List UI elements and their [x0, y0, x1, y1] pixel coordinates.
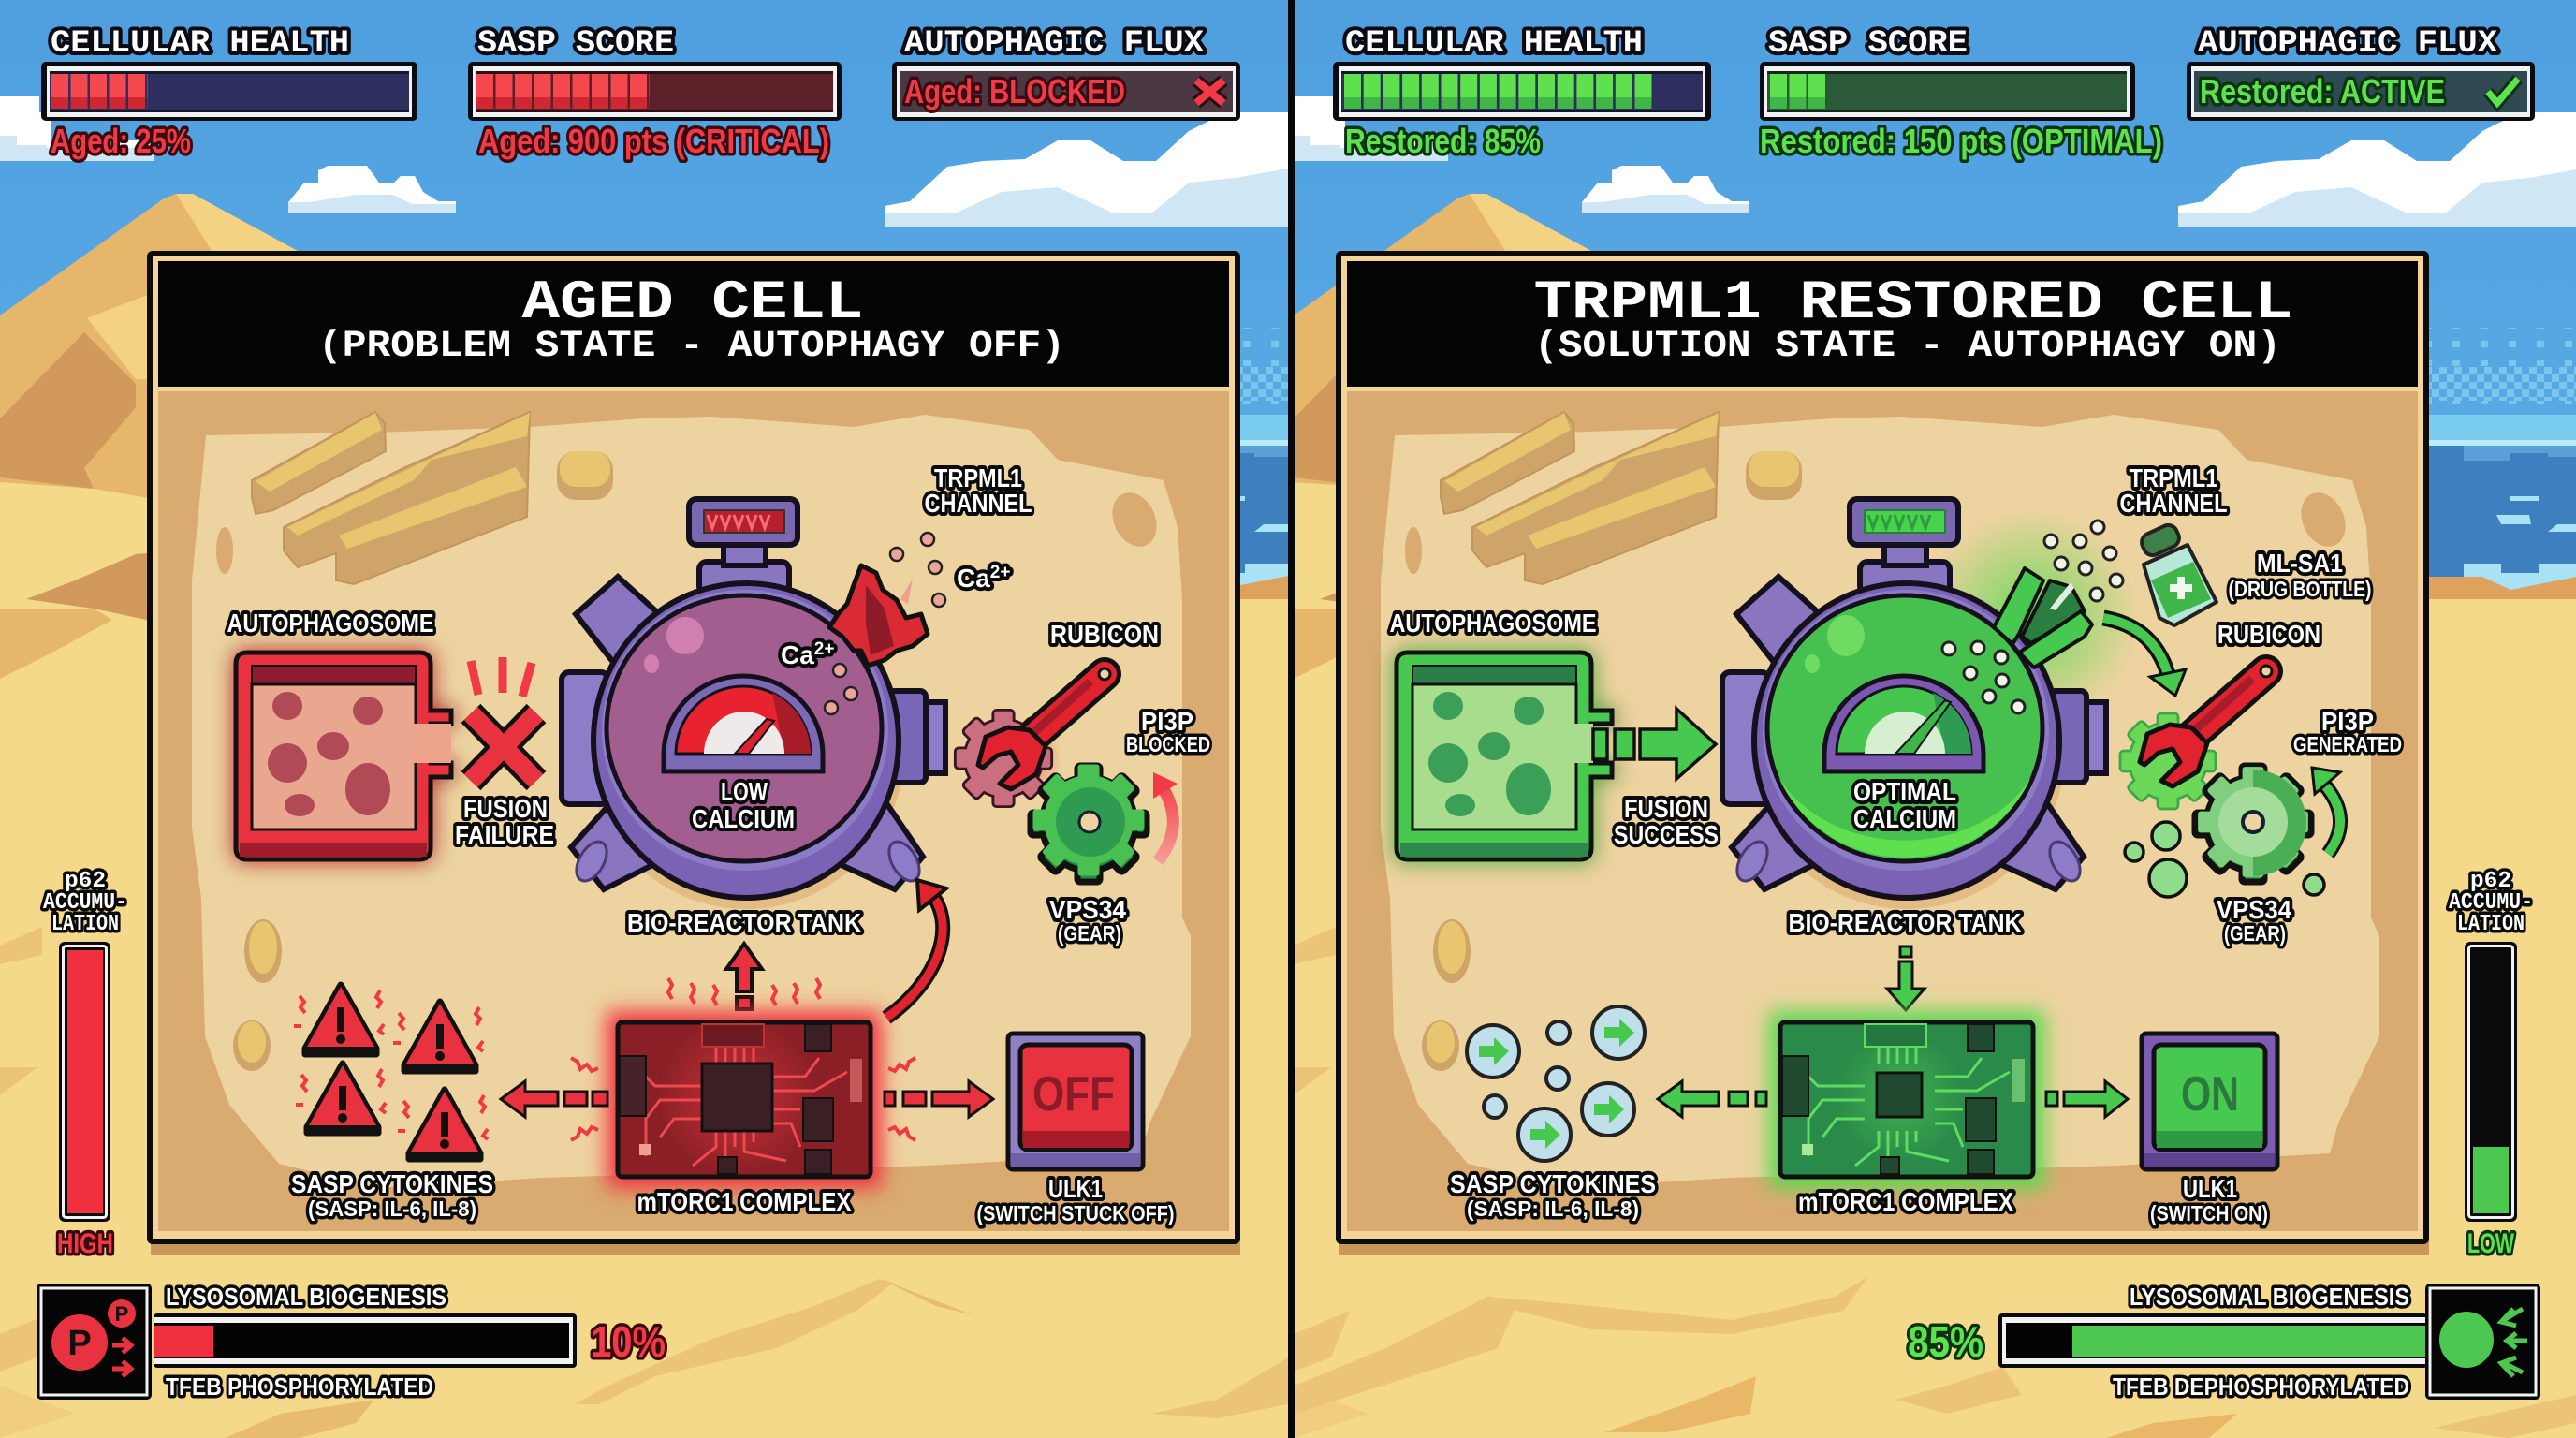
active gear and rubicon wrench	[2121, 666, 2272, 808]
label: rubicon: RUBICON	[2217, 620, 2320, 649]
label: SASP cytokines: (SASP: IL-6, IL-8)	[1467, 1196, 1639, 1221]
icon: green check	[2488, 79, 2518, 103]
label: SASP cytokines: SASP CYTOKINES	[291, 1169, 493, 1198]
heading: aged cell: (PROBLEM STATE - AUTOPHAGY OFF)	[318, 326, 1065, 368]
ULK1 switch on	[2142, 1034, 2277, 1169]
label: VPS34: VPS34	[2217, 895, 2291, 924]
mTORC1 circuit board	[618, 1018, 871, 1177]
lysosomal biogenesis: aged: LYSOSOMAL BIOGENESIS	[166, 1283, 446, 1311]
panel: aged cell	[147, 251, 1240, 1255]
p62 gauge: restored low	[2449, 869, 2533, 1259]
label: Ca2+ lower: 2+	[814, 639, 834, 659]
background: right beach scene	[1294, 0, 2576, 1438]
label: VPS34: VPS34	[1049, 895, 1126, 924]
label: VPS34	[1049, 895, 1126, 946]
heading: aged cell	[158, 261, 1229, 387]
ULK1 switch off	[1008, 1034, 1143, 1169]
label: SASP cytokines: (SASP: IL-6, IL-8)	[308, 1196, 476, 1221]
HUD: restored SASP score	[1760, 26, 2135, 121]
lysosomal biogenesis: aged	[37, 1283, 666, 1401]
lysosomal biogenesis: restored: TFEB DEPHOSPHORYLATED	[2113, 1372, 2409, 1401]
p62 gauge: aged high: ACCUMU-	[43, 890, 127, 916]
calcium particles	[825, 533, 945, 714]
faded gear and rubicon wrench	[957, 668, 1110, 805]
label: low calcium: LOW	[721, 777, 768, 806]
HUD: aged cellular health: CELLULAR HEALTH	[51, 26, 349, 62]
HUD: aged autophagic flux: Aged: BLOCKED	[904, 72, 1125, 110]
label: optimal calcium: OPTIMAL	[1853, 777, 1956, 806]
arrow: fading red	[1153, 772, 1178, 861]
VPS34 green gear	[1031, 764, 1147, 882]
icon: ML-SA1 drug bottle	[2139, 522, 2217, 625]
HUD: aged SASP score: SASP SCORE	[477, 26, 674, 62]
lysosomal biogenesis: aged: 10%	[591, 1317, 666, 1366]
heading: restored cell: (SOLUTION STATE - AUTOPHAGY ON)	[1534, 326, 2281, 368]
icon: TFEB phosphorylated	[37, 1284, 152, 1400]
label: TRPML1 channel	[925, 463, 1032, 518]
label: VPS34: (GEAR)	[1058, 921, 1121, 946]
label: ULK1 switch stuck off: (SWITCH STUCK OFF)	[977, 1201, 1174, 1225]
lysosomal biogenesis: restored: LYSOSOMAL BIOGENESIS	[2130, 1283, 2409, 1311]
label: optimal calcium: CALCIUM	[1853, 804, 1956, 833]
label: PI3P generated: PI3P	[2321, 707, 2374, 736]
p62 gauge: aged high: LATION	[51, 912, 119, 937]
label: ML-SA1	[2228, 549, 2372, 601]
heat squiggles	[571, 978, 915, 1140]
autophagosome with red glow	[236, 653, 451, 859]
HUD: restored value 150 pts: Restored: 150 pts (OPTIMAL)	[1760, 122, 2162, 160]
label: bio-reactor tank: BIO-REACTOR TANK	[1788, 908, 2022, 937]
HUD: aged autophagic flux: AUTOPHAGIC FLUX	[904, 26, 1205, 62]
label: autophagosome: AUTOPHAGOSOME	[1389, 609, 1597, 638]
HUD: restored cellular health: CELLULAR HEALTH	[1345, 26, 1643, 62]
VPS34 light gear	[2195, 766, 2311, 882]
arrow: mTORC1 to SASP	[501, 1081, 607, 1117]
label: PI3P generated: GENERATED	[2293, 732, 2402, 756]
label: fusion success: SUCCESS	[1614, 820, 1719, 849]
p62 gauge: aged high	[43, 869, 127, 1259]
HUD: restored autophagic flux: AUTOPHAGIC FLUX	[2198, 26, 2498, 62]
label: ML-SA1: ML-SA1	[2257, 549, 2343, 578]
arrow: drug to rubicon	[2103, 618, 2186, 696]
label: TRPML1 channel: CHANNEL	[2119, 489, 2228, 518]
mTORC1 circuit board	[1780, 1022, 2033, 1177]
ULK1 switch on: ON	[2181, 1067, 2239, 1122]
icon: fusion failure X	[471, 657, 536, 781]
label: ULK1 switch on	[2150, 1174, 2268, 1225]
broken TRPML1 channel	[829, 565, 928, 666]
label: bio-reactor tank: BIO-REACTOR TANK	[627, 908, 861, 937]
arrow: fusion success	[1593, 709, 1716, 779]
HUD: restored SASP score: SASP SCORE	[1768, 26, 1968, 62]
label: mTORC1 complex: mTORC1 COMPLEX	[1798, 1187, 2013, 1216]
icon: TFEB dephosphorylated	[2425, 1284, 2540, 1400]
label: low calcium	[692, 777, 795, 833]
arrow: tank to mTORC1	[1887, 946, 1925, 1010]
label: ULK1 switch stuck off	[977, 1174, 1174, 1225]
lysosomal biogenesis: restored: 85%	[1908, 1317, 1983, 1366]
label: SASP cytokines	[291, 1169, 493, 1221]
bio-reactor tank (optimal calcium)	[1722, 499, 2106, 909]
HUD: restored autophagic flux	[2187, 26, 2535, 121]
label: PI3P generated	[2293, 707, 2402, 756]
HUD: aged value 900 pts: Aged: 900 pts (CRITICAL)	[478, 122, 829, 160]
label: rubicon: RUBICON	[1050, 620, 1159, 649]
open channel glow	[1924, 510, 2139, 726]
p62 gauge: restored low: LOW	[2467, 1228, 2514, 1259]
open TRPML1 channel	[1994, 568, 2092, 668]
heading: restored cell: TRPML1 RESTORED CELL	[1533, 273, 2293, 334]
HUD: aged cellular health	[41, 26, 417, 121]
label: fusion failure: FAILURE	[455, 820, 554, 849]
p62 gauge: aged high: HIGH	[57, 1228, 113, 1259]
label: low calcium: CALCIUM	[692, 804, 795, 833]
HUD: restored autophagic flux: Restored: ACTIVE	[2200, 72, 2445, 110]
heading: aged cell: AGED CELL	[522, 273, 863, 334]
arrow: green curved	[2312, 768, 2340, 854]
heading: restored cell	[1347, 261, 2418, 387]
icon: red X	[1196, 81, 1223, 103]
label: fusion success	[1614, 794, 1719, 849]
p62 gauge: restored low: ACCUMU-	[2449, 890, 2533, 916]
autophagosome with green glow	[1397, 653, 1612, 859]
ULK1 switch off: OFF	[1032, 1067, 1115, 1122]
background: left beach scene	[0, 0, 1288, 1438]
label: fusion failure: FUSION	[463, 794, 548, 823]
icon: TFEB phosphorylated: P	[115, 1302, 128, 1326]
label: PI3P blocked	[1126, 707, 1210, 756]
arrow: mTORC1 to ULK1	[2046, 1081, 2128, 1117]
label: TRPML1 channel	[2119, 463, 2228, 518]
label: VPS34: (GEAR)	[2224, 921, 2286, 946]
bio-reactor tank (low calcium)	[562, 499, 945, 909]
label: autophagosome: AUTOPHAGOSOME	[227, 609, 434, 638]
SASP warning triangles	[294, 985, 488, 1159]
label: Ca2+ upper: 2+	[990, 563, 1010, 582]
label: SASP cytokines: SASP CYTOKINES	[1450, 1169, 1656, 1198]
label: fusion success: FUSION	[1624, 794, 1708, 823]
p62 gauge: aged high: p62	[65, 869, 106, 894]
SASP cytokine bubbles	[1467, 1006, 1645, 1161]
label: SASP cytokines	[1450, 1169, 1656, 1221]
HUD: restored value 85%: Restored: 85%	[1345, 122, 1541, 160]
gauge	[664, 676, 823, 771]
arrow: mTORC1 to rubicon	[886, 880, 946, 1018]
calcium particles	[1942, 521, 2123, 713]
p62 gauge: restored low: LATION	[2457, 912, 2525, 937]
icon: TFEB phosphorylated: P	[67, 1324, 92, 1363]
label: PI3P blocked: BLOCKED	[1126, 732, 1210, 756]
label: Ca2+ upper: Ca	[957, 564, 990, 593]
p62 gauge: restored low: p62	[2470, 869, 2511, 894]
HUD: aged autophagic flux	[892, 26, 1240, 121]
panel: restored cell	[1336, 251, 2429, 1255]
right-half dune ridges	[1295, 1277, 2576, 1438]
vesicles	[2125, 822, 2324, 897]
label: ULK1 switch on: ULK1	[2183, 1174, 2237, 1203]
label: PI3P blocked: PI3P	[1141, 707, 1193, 736]
left-half dune ridges	[225, 1279, 1288, 1438]
arrow: mTORC1 to SASP	[1658, 1081, 1766, 1117]
label: ULK1 switch stuck off: ULK1	[1048, 1174, 1103, 1203]
label: mTORC1 complex: mTORC1 COMPLEX	[637, 1187, 852, 1216]
label: optimal calcium	[1853, 777, 1956, 833]
HUD: aged value 25%: Aged: 25%	[51, 122, 191, 160]
HUD: aged SASP score	[468, 26, 842, 121]
label: fusion failure	[455, 794, 554, 849]
center divider	[1288, 0, 1295, 1438]
arrow: mTORC1 to ULK1	[885, 1081, 993, 1117]
label: ML-SA1: (DRUG BOTTLE)	[2228, 577, 2372, 601]
label: TRPML1 channel: TRPML1	[934, 463, 1022, 492]
label: TRPML1 channel: TRPML1	[2129, 463, 2218, 492]
lysosomal biogenesis: restored	[1908, 1283, 2540, 1401]
lysosomal biogenesis: aged: TFEB PHOSPHORYLATED	[166, 1372, 433, 1401]
label: VPS34	[2217, 895, 2291, 946]
arrow: mTORC1 to tank	[726, 944, 762, 1009]
gauge	[1824, 676, 1983, 771]
HUD: restored cellular health	[1333, 26, 1711, 121]
label: TRPML1 channel: CHANNEL	[925, 489, 1032, 518]
label: ULK1 switch on: (SWITCH ON)	[2150, 1201, 2268, 1225]
label: Ca2+ lower: Ca	[781, 640, 814, 669]
